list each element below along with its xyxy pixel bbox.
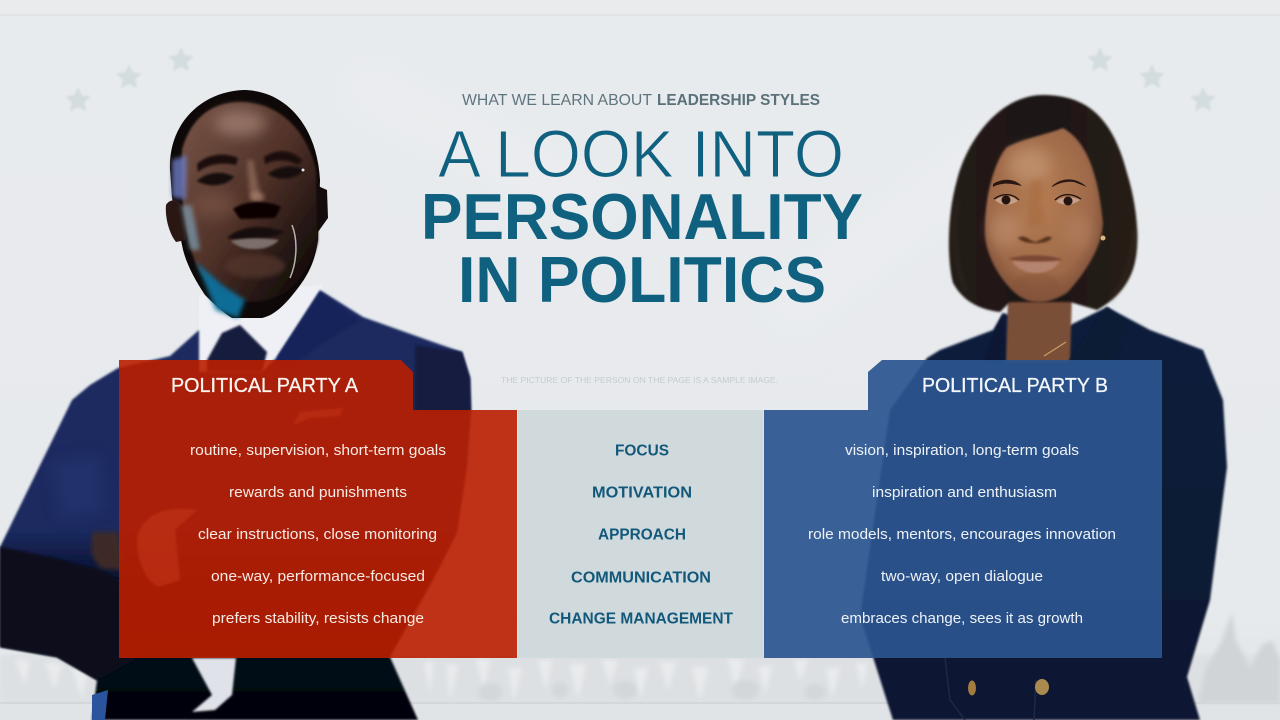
party A traits: clear instructions, close monitoring (198, 526, 437, 543)
category labels: COMMUNICATION (571, 570, 711, 586)
party B traits: inspiration and enthusiasm (872, 484, 1057, 501)
category labels: APPROACH (598, 526, 686, 544)
kicker line (462, 92, 820, 109)
category labels: CHANGE MANAGEMENT (549, 610, 733, 628)
heading block (421, 92, 863, 316)
portrait: female politician (860, 95, 1227, 720)
panel shape: blue tab and body (764, 360, 1162, 658)
title (421, 117, 863, 316)
party B traits: role models, mentors, encourages innovation (808, 526, 1116, 543)
kicker line: LEADERSHIP STYLES (657, 92, 820, 109)
portrait: male politician (0, 90, 471, 720)
party A traits: routine, supervision, short-term goals (190, 442, 446, 459)
party A traits: prefers stability, resists change (212, 610, 424, 627)
panel: comparison categories (518, 410, 764, 658)
stars right (1087, 47, 1216, 111)
title: PERSONALITY (421, 180, 863, 253)
title: IN POLITICS (458, 243, 826, 316)
crowd silhouettes (0, 612, 1280, 704)
party B traits: vision, inspiration, long-term goals (845, 442, 1079, 459)
center background (518, 410, 764, 658)
category labels (549, 442, 733, 628)
party B traits (808, 442, 1116, 627)
party A traits: rewards and punishments (229, 484, 407, 501)
party A traits: one-way, performance-focused (211, 568, 425, 585)
heading: party A: POLITICAL PARTY A (171, 375, 359, 397)
stars left (65, 47, 194, 111)
party B traits: embraces change, sees it as growth (841, 610, 1083, 627)
panel: political party A (119, 360, 517, 658)
panel shape: red tab and body (119, 360, 517, 658)
category labels: FOCUS (615, 442, 669, 460)
disclaimer note: THE PICTURE OF THE PERSON ON THE PAGE IS A SAMPLE IMAGE. (501, 375, 778, 385)
heading: party B: POLITICAL PARTY B (922, 375, 1108, 397)
party A traits (190, 442, 446, 627)
kicker line: WHAT WE LEARN ABOUT (462, 92, 652, 109)
title: A LOOK INTO (438, 117, 844, 192)
party B traits: two-way, open dialogue (881, 568, 1043, 585)
panel: political party B (764, 360, 1162, 658)
category labels: MOTIVATION (592, 484, 692, 502)
